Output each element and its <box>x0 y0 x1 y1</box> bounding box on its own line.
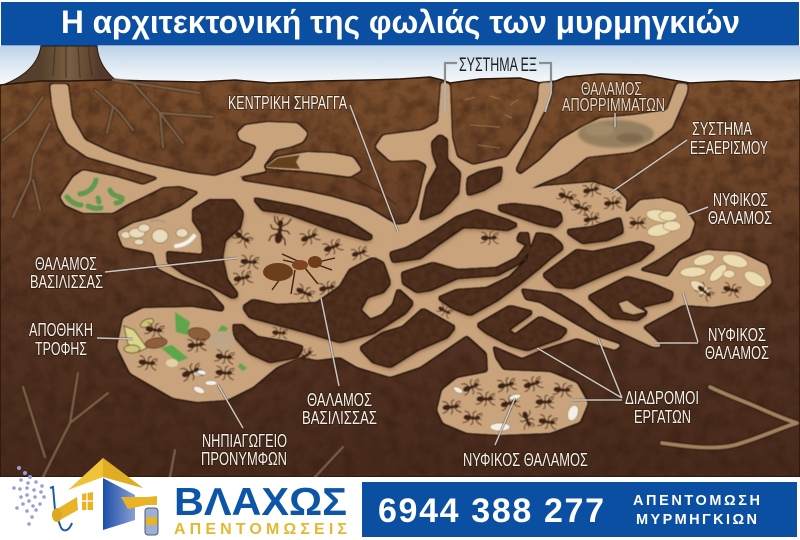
label: food storage: ΑΠΟΘΗΚΗ <box>29 319 93 340</box>
queen ant <box>263 254 335 294</box>
label: waste chamber: ΑΠΟΡΡΙΜΜΑΤΩΝ <box>562 94 665 115</box>
label: queen chamber left: ΘΑΛΑΜΟΣ <box>35 253 97 274</box>
large pupa chamber contents <box>680 252 768 303</box>
ants in queen chamber <box>231 215 344 303</box>
label: queen chamber lower: ΒΑΣΙΛΙΣΣΑΣ <box>302 407 377 428</box>
tree trunk <box>0 46 118 86</box>
soil ground <box>0 74 800 477</box>
logo icon: house and sprayer <box>50 458 158 535</box>
label: pupa chamber upper <box>708 189 772 228</box>
logo tagline: ΑΠΕΝΤΟΜΩΣΕΙΣ <box>174 521 347 538</box>
label: pupa chamber upper: ΘΑΛΑΜΟΣ <box>708 207 772 228</box>
footer background <box>0 477 800 540</box>
label: worker corridors <box>625 387 699 427</box>
soil islands between tunnels <box>167 135 673 367</box>
label: queen chamber left: ΒΑΣΙΛΙΣΣΑΣ <box>30 271 103 292</box>
label: food storage: ΤΡΟΦΗΣ <box>35 338 87 359</box>
soil wedge and crack <box>240 155 397 205</box>
label: worker corridors: ΔΙΑΔΡΟΜΟΙ <box>625 387 699 408</box>
label: larvae nursery: ΝΗΠΙΑΓΩΓΕΙΟ <box>202 430 287 451</box>
logo icon: spray droplets <box>12 466 46 526</box>
egg chamber contents <box>121 220 194 246</box>
leader lines <box>97 63 708 445</box>
service text <box>633 493 760 528</box>
label: queen chamber left <box>30 253 103 292</box>
vent chamber ants <box>350 182 622 319</box>
contact panel <box>362 482 797 537</box>
label: waste chamber: ΘΑΛΑΜΟΣ <box>581 78 642 99</box>
phone number: 6944 388 277 <box>378 492 604 530</box>
label: queen chamber lower <box>302 389 377 428</box>
food storage contents <box>124 312 317 395</box>
label: queen chamber lower: ΘΑΛΑΜΟΣ <box>307 389 372 410</box>
label: larvae nursery <box>201 430 287 469</box>
closed chamber <box>263 152 362 177</box>
upper pupa chamber contents <box>629 208 681 239</box>
label: central tunnel: ΚΕΝΤΡΙΚΗ ΣΗΡΑΓΓΑ <box>228 92 347 113</box>
label: food storage <box>29 319 93 359</box>
pale marks in upper soil block <box>465 96 518 148</box>
label: pupa chamber right: ΝΥΦΙΚΟΣ <box>708 324 766 345</box>
label: worker corridors: ΕΡΓΑΤΩΝ <box>634 406 691 427</box>
sky <box>0 46 800 90</box>
logo wordmark: ΒΛΑΧΩΣ <box>174 481 347 524</box>
label: larvae nursery: ΠΡΟΝΥΜΦΩΝ <box>201 448 287 469</box>
slug-shaped tunnel end <box>618 300 647 315</box>
plant roots <box>3 80 797 477</box>
green grubs in small chamber <box>67 180 122 208</box>
lower chamber ants and larvae <box>442 375 580 431</box>
label: pupa chamber upper: ΝΥΦΙΚΟΣ <box>713 189 768 210</box>
waste debris pile <box>578 120 654 148</box>
label: pupa chamber right <box>705 324 769 363</box>
label: pupa chamber right: ΘΑΛΑΜΟΣ <box>705 342 769 363</box>
label: pupa chamber bottom: ΝΥΦΙΚΟΣ ΘΑΛΑΜΟΣ <box>463 449 588 470</box>
label: ventilation system: ΣΥΣΤΗΜΑ <box>692 118 752 139</box>
tunnel network <box>50 82 772 435</box>
label: exit system: ΣΥΣΤΗΜΑ ΕΞ <box>459 55 537 76</box>
title banner: Η αρχιτεκτονική της φωλιάς των μυρμηγκιών <box>61 4 740 40</box>
label: ventilation system <box>690 118 768 158</box>
service text: ΑΠΕΝΤΟΜΩΣΗ <box>633 493 760 509</box>
service text: ΜΥΡΜΗΓΚΙΩΝ <box>636 512 757 528</box>
label: waste chamber <box>562 78 665 115</box>
